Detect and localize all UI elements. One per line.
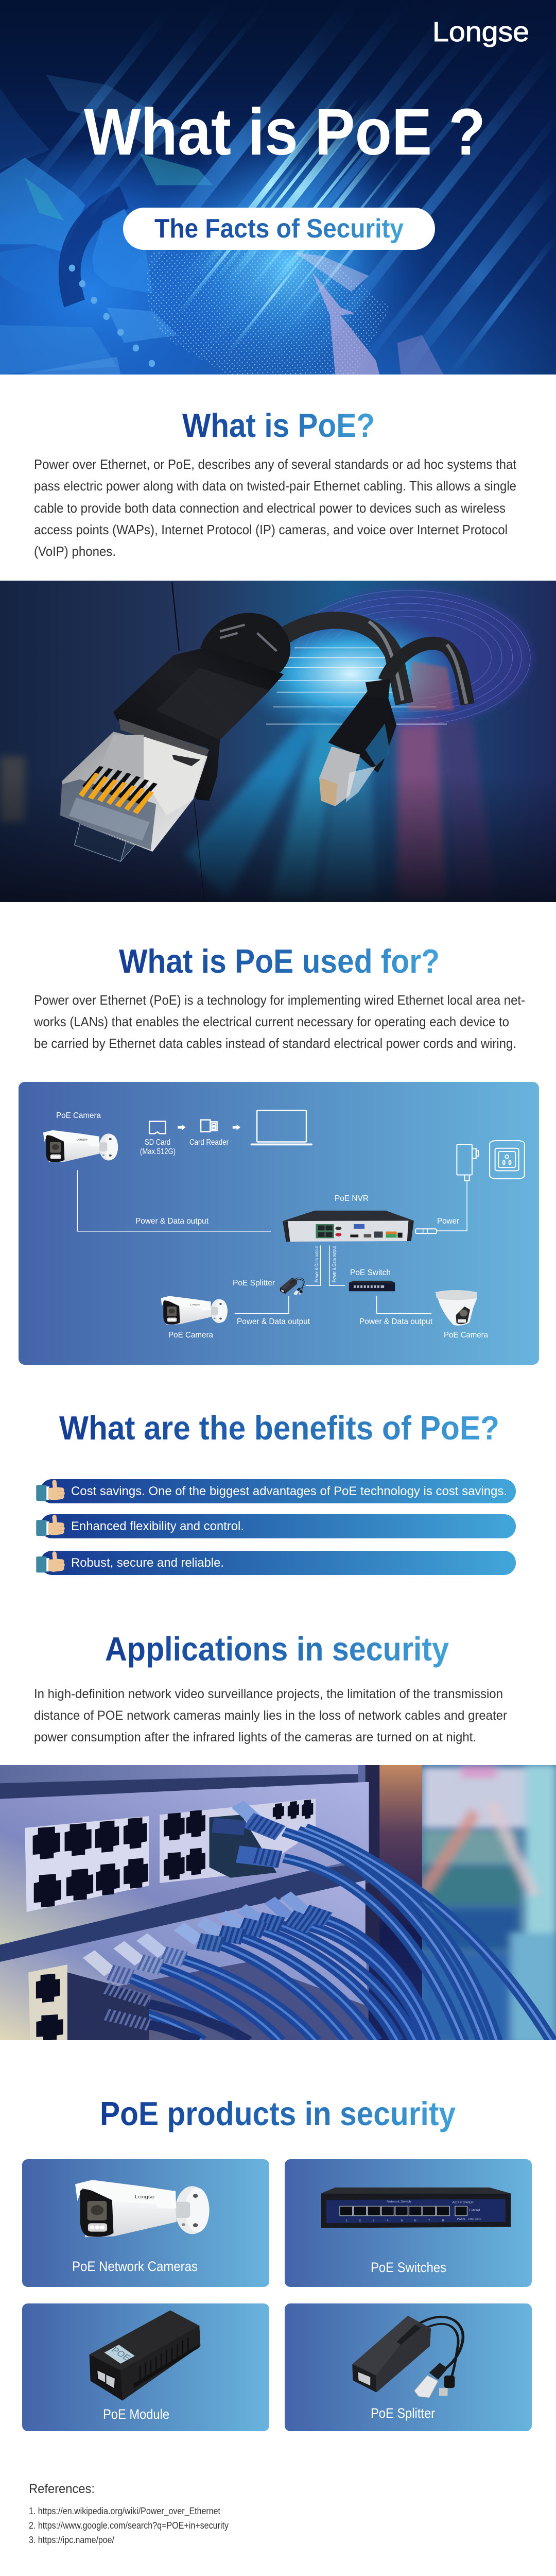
icon: network switch: 2	[359, 2219, 361, 2222]
diagram labels: PoE NVR	[335, 1194, 369, 1203]
diagram labels: Power & Data output	[135, 1217, 209, 1226]
icon: network switch: 5	[401, 2219, 403, 2222]
paragraph: PoE definition: cable to provide both data connection and electrical power to devices such as wireless	[34, 500, 506, 516]
icon: network switch: Extend	[469, 2209, 480, 2212]
subtitle pill: The Facts of Security	[154, 214, 404, 244]
product card: PoE network cameras: PoE Network Cameras	[72, 2259, 198, 2274]
paragraph: PoE definition: access points (WAPs), Internet Protocol (IP) cameras, and voice over Internet Protocol	[34, 522, 508, 537]
hero banner	[0, 0, 556, 375]
diagram labels: PoE Switch	[350, 1268, 391, 1277]
icon: PoE injector module	[90, 2310, 200, 2400]
icon: SD card, reader, laptop and arrows	[149, 1110, 312, 1145]
paragraph: PoE use: works (LANs) that enables the electrical current necessary for operating each device to	[33, 1014, 509, 1029]
diagram labels	[56, 1111, 488, 1340]
photo: network switch with blue patch cables	[0, 1762, 556, 2043]
icon: network switch: Network Switch	[387, 2200, 411, 2204]
icon: PoE splitter	[280, 1278, 304, 1295]
paragraph: applications: distance of POE network cameras mainly lies in the loss of network cables and greater	[34, 1708, 507, 1723]
icon: thumbs up	[36, 1515, 65, 1536]
icon: thumbs up	[36, 1551, 65, 1572]
diagram labels: Power & Data output	[332, 1246, 337, 1282]
heading: applications in security: Applications in security	[105, 1630, 449, 1668]
references: References:	[29, 2482, 95, 2496]
paragraph: PoE use	[33, 992, 525, 1051]
paragraph: PoE definition: pass electric power along with data on twisted-pair Ethernet cabling. This allows a single	[34, 478, 516, 494]
diagram labels: Power & Data output	[237, 1317, 310, 1326]
icon: PoE splitter	[352, 2316, 463, 2398]
product card: PoE splitter	[285, 2303, 532, 2431]
diagram labels: PoE Camera	[56, 1111, 101, 1120]
benefit bar: reliability: Robust, secure and reliable.	[71, 1556, 224, 1570]
main title: What is PoE ?	[84, 95, 485, 169]
diagram connections	[77, 1170, 467, 1314]
product card: PoE network cameras	[22, 2159, 269, 2287]
diagram labels: (Max.512G)	[140, 1147, 176, 1156]
icon: network switch: 7	[428, 2219, 430, 2222]
product card: PoE switches: PoE Switches	[371, 2260, 446, 2275]
diagram labels: PoE Camera	[168, 1331, 213, 1340]
paragraph: applications	[34, 1687, 507, 1744]
diagram labels: PoE Splitter	[233, 1279, 275, 1287]
icon: network switch: ON OFF	[468, 2217, 482, 2221]
references: 1. https://en.wikipedia.org/wiki/Power_over_Ethernet	[29, 2506, 220, 2517]
photo: ethernet cable connectors	[0, 579, 556, 904]
paragraph: PoE use: Power over Ethernet (PoE) is a technology for implementing wired Ethernet local area net-	[34, 992, 525, 1008]
heading: PoE products: PoE products in security	[100, 2095, 456, 2132]
product card: PoE module: PoE Module	[103, 2406, 169, 2422]
heading: what is PoE: What is PoE?	[182, 406, 375, 444]
product card: PoE splitter: PoE Splitter	[371, 2405, 435, 2421]
icon: network switch	[321, 2188, 511, 2228]
references	[29, 2482, 229, 2545]
icon: bullet camera top	[43, 1130, 118, 1162]
icon: bullet camera	[75, 2180, 210, 2237]
paragraph: PoE definition: (VoIP) phones.	[34, 544, 116, 559]
heading: benefits of PoE: What are the benefits of PoE?	[59, 1409, 499, 1447]
icon: power adapter and socket	[457, 1141, 525, 1181]
references: 2. https://www.google.com/search?q=POE+in+security	[29, 2520, 229, 2531]
benefit bar: reliability	[36, 1551, 516, 1575]
benefit bar: cost savings	[36, 1479, 516, 1503]
diagram labels: Card Reader	[189, 1138, 229, 1147]
benefit bar: flexibility: Enhanced flexibility and control.	[71, 1519, 244, 1533]
icon: bullet camera bottom	[161, 1296, 228, 1325]
icon: network switch: 6	[414, 2219, 416, 2222]
paragraph: PoE use: be carried by Ethernet data cables instead of standard electrical power cords and wiring.	[34, 1036, 516, 1051]
hero background artwork	[0, 0, 556, 375]
paragraph: PoE definition	[34, 456, 517, 559]
diagram labels: Power	[437, 1217, 460, 1226]
diagram labels: Power & Data output	[314, 1246, 320, 1282]
product card: PoE switches	[285, 2159, 532, 2287]
icon: network switch: 4	[387, 2219, 389, 2222]
paragraph: applications: In high-definition network video surveillance projects, the limitation of the transmission	[34, 1687, 503, 1701]
icon: network switch: ACT POWER	[452, 2201, 474, 2204]
icon: network switch: 3	[372, 2219, 375, 2222]
icon: network switch: 1	[345, 2219, 348, 2222]
references: 3. https://ipc.name/poe/	[29, 2535, 114, 2545]
paragraph: applications: power consumption after the infrared lights of the cameras are turned on at night.	[34, 1730, 476, 1744]
product card: PoE module	[22, 2303, 269, 2431]
icon: PoE injector module: POE	[109, 2345, 133, 2362]
benefit bar: cost savings: Cost savings. One of the biggest advantages of PoE technology is cost savings.	[71, 1484, 507, 1498]
subtitle pill	[123, 208, 435, 250]
panel: PoE network diagram	[19, 1082, 539, 1365]
diagram labels: PoE Camera	[444, 1331, 488, 1340]
diagram labels: Power & Data output	[359, 1317, 433, 1326]
icon: thumbs up	[36, 1480, 65, 1501]
icon: network switch: WAN	[457, 2217, 465, 2221]
icon: PoE switch	[349, 1281, 395, 1291]
heading: what is PoE used for: What is PoE used for?	[119, 942, 440, 980]
diagram labels: SD Card	[145, 1138, 170, 1147]
icon: PoE NVR recorder	[283, 1211, 437, 1242]
icon: network switch: 8	[442, 2219, 444, 2222]
paragraph: PoE definition: Power over Ethernet, or PoE, describes any of several standards or ad hoc systems that	[34, 456, 517, 472]
logo: Longse	[432, 16, 529, 47]
benefit bar: flexibility	[36, 1514, 516, 1538]
icon: dome camera	[436, 1290, 477, 1326]
